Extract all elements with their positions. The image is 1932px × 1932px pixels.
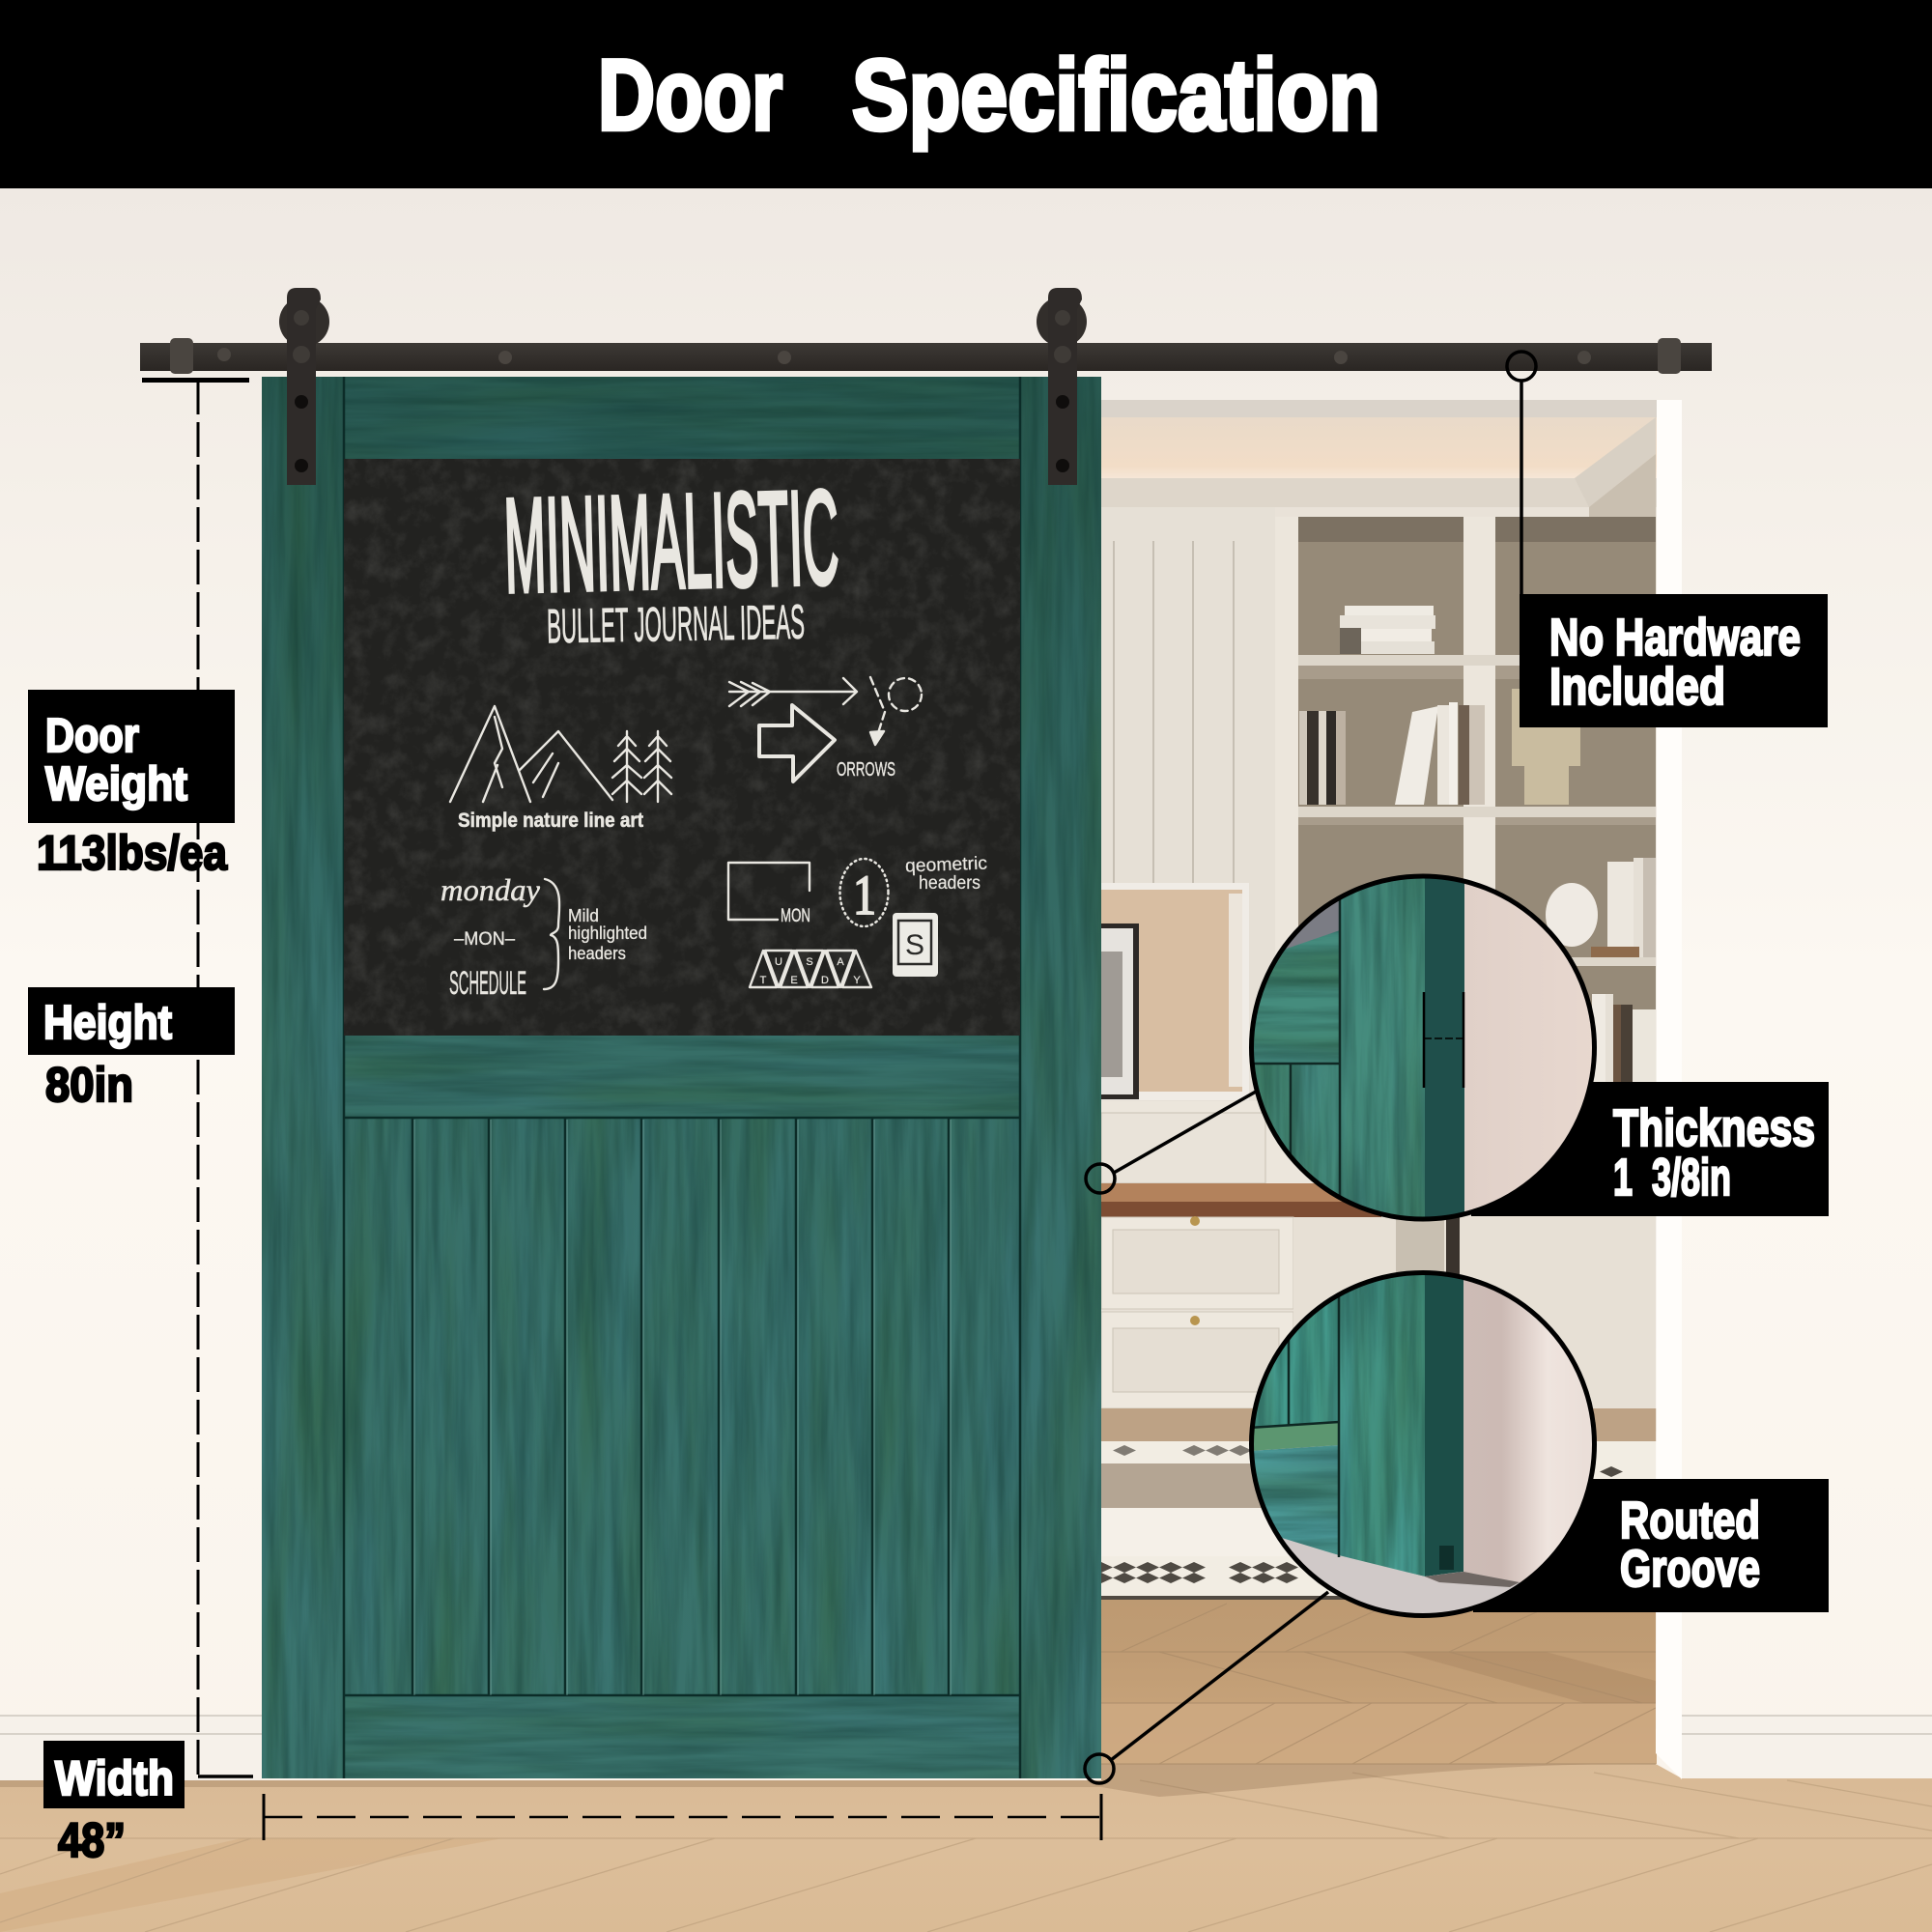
thickness marker <box>1424 992 1463 1088</box>
chalk: highlighted headers <box>440 872 647 1002</box>
dimension: height line <box>142 380 253 1777</box>
label: width: Width <box>55 1751 174 1805</box>
track rail <box>140 343 1712 371</box>
books: middle group <box>1395 702 1485 805</box>
left hanger <box>279 288 329 485</box>
label: no hardware included: No Hardware <box>1549 609 1801 667</box>
books: left group <box>1299 711 1346 805</box>
chalk: geometric headers: T <box>760 975 767 986</box>
chalk: arrows caption: ORROWS <box>837 759 895 781</box>
title banner <box>0 0 1932 188</box>
label: no hardware included: Included <box>1549 658 1725 716</box>
chalk: geometric headers: qeometric <box>905 854 987 876</box>
door frame trim (white) <box>1656 400 1682 1779</box>
chalk: geometric headers: D <box>821 975 829 986</box>
title banner: Specification <box>852 40 1380 152</box>
door: horizontal rails <box>344 377 1020 1778</box>
magnifier: routed groove detail <box>1250 1271 1600 1642</box>
door shadow on floor <box>0 1764 1633 1797</box>
label: thickness box: 1 3/8in <box>1613 1149 1731 1207</box>
door: shading overlay <box>262 377 1101 1778</box>
label: thickness box: Thickness <box>1613 1099 1815 1157</box>
chalk: mountains and trees <box>450 706 671 802</box>
chalk: geometric headers: headers <box>919 873 980 894</box>
chalk: highlighted headers: highlighted <box>568 923 647 943</box>
baseboards <box>0 1716 1932 1780</box>
chalk: geometric headers: A <box>837 956 844 968</box>
door: vertical boards <box>262 377 1101 1778</box>
ceiling light cove <box>1101 417 1657 478</box>
chalkboard panel: BULLET JOURNAL IDEAS <box>547 595 805 653</box>
barn door <box>262 377 1101 1778</box>
door: plank grooves <box>344 377 1020 1778</box>
crown molding <box>1101 417 1657 517</box>
chalk: geometric headers: S <box>806 956 813 968</box>
artwork <box>1101 883 1249 1100</box>
label: height: Height <box>43 997 172 1049</box>
door: plank highlights <box>414 1120 951 1695</box>
callout: thickness leader <box>1086 1092 1256 1193</box>
books: top stack <box>1340 606 1435 654</box>
chalkboard panel <box>344 459 1020 1036</box>
chalk: highlighted headers: –MON– <box>454 929 515 950</box>
right hanger <box>1037 288 1087 485</box>
dimension: width line <box>264 1794 1101 1840</box>
chalk: geometric headers: 1 <box>853 864 876 926</box>
vase and books <box>1546 858 1656 957</box>
chalkboard panel: MINIMALISTIC <box>502 463 840 621</box>
wall panel grooves <box>1114 541 1234 883</box>
chalk: geometric headers: Y <box>853 975 861 986</box>
label: height <box>28 987 235 1112</box>
chalk: geometric headers: S <box>905 929 924 961</box>
chalk: geometric headers: U <box>775 956 782 968</box>
label: routed groove box: Routed <box>1620 1492 1760 1549</box>
console drawers and counter <box>1101 1101 1656 1408</box>
label: routed groove box <box>1473 1479 1829 1612</box>
chalk: highlighted headers: Mild <box>568 906 599 925</box>
floor <box>0 1764 1932 1932</box>
room floor and rug <box>1090 1408 1657 1764</box>
label: door weight: 113lbs/ea <box>37 826 228 880</box>
label: width <box>43 1741 185 1867</box>
label: thickness box <box>1471 1082 1829 1216</box>
lamp <box>1512 689 1580 805</box>
label: routed groove box: Groove <box>1620 1540 1760 1598</box>
label: width: 48” <box>58 1813 126 1867</box>
title banner: Door <box>598 40 782 152</box>
books: low group <box>1592 994 1656 1082</box>
chalk: geometric headers <box>728 854 987 987</box>
label: no hardware included <box>1520 594 1828 727</box>
room behind the door opening <box>1090 400 1657 1764</box>
chalk: highlighted headers: SCHEDULE <box>449 965 526 1002</box>
chalk: arrows <box>729 677 922 781</box>
rail bolts and stops <box>170 338 1681 374</box>
chalk: geometric headers: E <box>790 975 798 986</box>
label: door weight: Weight <box>45 758 187 810</box>
bookshelf <box>1275 517 1656 1116</box>
chalk: highlighted headers: monday <box>440 872 541 907</box>
callout: no hardware leader <box>1507 352 1536 595</box>
callout: routed groove leader <box>1085 1592 1328 1783</box>
chalk: nature caption: Simple nature line art <box>458 810 643 832</box>
magnifier: thickness detail <box>1250 873 1600 1228</box>
chalk: geometric headers: MON <box>781 906 810 926</box>
label: height: 80in <box>45 1058 133 1112</box>
barn door hardware <box>140 288 1712 485</box>
label: door weight <box>28 690 235 880</box>
label: door weight: Door <box>45 710 139 762</box>
chalk: highlighted headers: headers <box>568 944 626 963</box>
